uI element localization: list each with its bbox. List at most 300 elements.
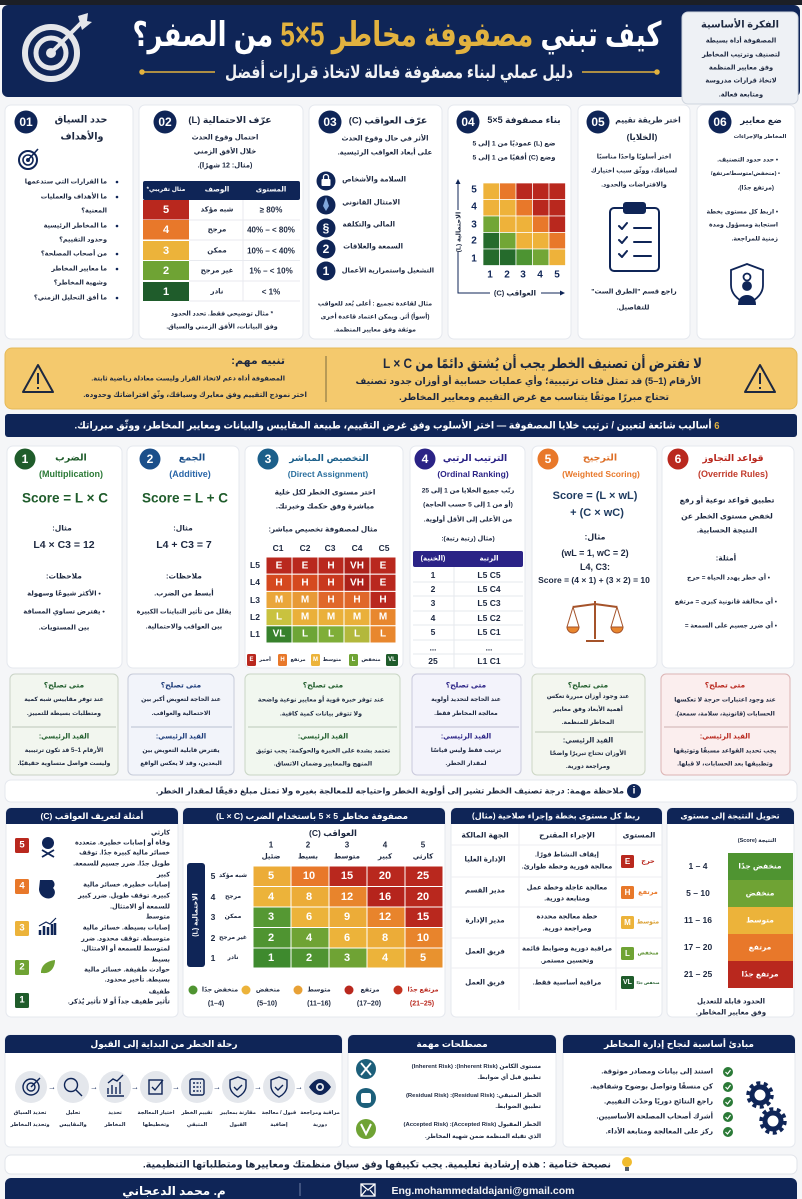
legend: مرتفع جدًا <box>407 986 439 994</box>
grid legend: منخفض <box>361 657 381 663</box>
panel: method 2 additive: 2 <box>147 452 154 466</box>
likelihood table: 5 <box>163 204 169 216</box>
score grid: 9 <box>344 911 350 923</box>
grid legend: مرتفع <box>290 657 306 663</box>
severity descriptions: خسائر مالية كبيرة جدًا. توقف <box>79 849 170 856</box>
panel: method 1 multiplication: • الأكثر شيوعًا وسهولة <box>27 588 101 598</box>
likelihood table: 3 <box>163 245 169 257</box>
journey labels: إضافية <box>270 1122 288 1128</box>
when-to-use card 4: معالجة المخاطر فقط. <box>434 710 498 717</box>
mini matrix: 1 <box>471 254 477 264</box>
panel: risk journey: رحلة الخطر من البداية إلى القبول <box>90 1039 238 1050</box>
mini matrix: 1 <box>487 270 493 280</box>
when-to-use card 5: عند وجود أوزان مبررة تعكس <box>547 692 629 700</box>
subtitle: دليل عملي لبناء مصفوفة فعالة لاتخاذ قرارات أفضل <box>225 60 573 83</box>
panel: method 5 weighted scoring: مثال: <box>585 532 605 542</box>
severity descriptions: كبير <box>156 872 170 878</box>
row headers: مرجح <box>225 894 241 900</box>
panel: principles: مبادئ أساسية لنجاح إدارة المخاطر <box>603 1038 754 1050</box>
bullet list: ما الأهداف والعمليات <box>41 192 107 200</box>
icon: gears <box>748 1083 785 1133</box>
likelihood table: مرجح <box>208 226 226 234</box>
panel: method 6 override rules: أمثلة: <box>716 552 736 562</box>
panel: step 02 likelihood: وفق البيانات، الأفق الزمني والسياق. <box>166 322 278 330</box>
severity descriptions: تأثير طفيف جداً أو لا تأثير يُذكر. <box>68 996 170 1006</box>
direct assignment grid: H <box>301 578 309 588</box>
column headers: كبير <box>377 852 393 860</box>
row headers: نادر <box>226 954 239 961</box>
score grid: 6 <box>344 932 350 944</box>
journey labels: تحديد <box>108 1110 122 1116</box>
icon: envelope <box>361 1184 375 1196</box>
header banner <box>2 5 800 97</box>
callout: core idea: ومتابعة فعالة. <box>719 92 763 98</box>
direct assignment grid: H <box>327 594 335 606</box>
when-to-use card 1: الأرقام 1–5 قد تكون ترتيبية <box>25 746 103 754</box>
panel: step 02 likelihood: 02 <box>158 115 172 129</box>
journey steps <box>15 1071 336 1103</box>
panel: method 1 multiplication: L4 × C3 = 12 <box>33 539 95 551</box>
level bands: مرتفع جدًا <box>741 970 779 978</box>
panel: step 03 consequences: عرّف العواقب (C) <box>349 114 427 126</box>
panel: level action table: الجهة المالكة <box>461 830 509 840</box>
direct assignment grid <box>247 543 398 666</box>
severity descriptions: بسيط <box>151 956 170 964</box>
mini matrix: 3 <box>520 270 526 280</box>
ranking table: 25 <box>428 656 438 666</box>
when-to-use card 4 <box>412 674 521 775</box>
column headers: 1 <box>269 840 274 850</box>
ranking table: ... <box>486 644 492 652</box>
when-to-use card 5 <box>532 674 645 775</box>
term text: مستوى الكامن (Inherent Risk): (Inherent Risk) <box>412 1063 541 1070</box>
when-to-use card 3: ولا تتوفر بيانات كمية كافية. <box>280 710 362 718</box>
direct assignment grid: L <box>354 628 360 640</box>
bullet list <box>25 178 118 302</box>
panel: method 3 direct assignment: مثال لمصفوفة تخصيص مباشر: <box>268 524 378 534</box>
journey labels: تحليل <box>66 1110 80 1116</box>
likelihood table: ممكن <box>207 246 227 254</box>
level badges: VL <box>623 979 633 986</box>
severity badges: 1 <box>19 994 25 1006</box>
term text: الخطر المقبول (Accepted Risk): (Accepted Risk) <box>404 1122 541 1128</box>
panel: step 03 consequences: (أسوأ) أثر. ويمكن اعتماد قاعدة أخرى <box>321 312 429 320</box>
severity descriptions: لمتوسط للسمعة أو الامتثال. <box>81 944 170 952</box>
direct assignment grid: C5 <box>379 543 390 553</box>
score grid: 1 <box>268 952 274 964</box>
column headers: كارثي <box>413 852 434 860</box>
mini matrix: 2 <box>504 270 510 280</box>
panel: step 03 consequences: الأثر في حال وقوع الحدث <box>341 134 429 142</box>
grid legend <box>247 654 398 666</box>
when-to-use card 3: القيد الرئيسي: <box>298 734 348 740</box>
panel: method 6 override rules: 6 <box>675 452 682 466</box>
panel: method 1 multiplication: 1 <box>22 452 29 466</box>
panel: step 05 scoring method <box>578 105 690 339</box>
ranking table: 2 <box>431 584 436 594</box>
warning banner: اختر نموذج التقييم وفق معايرك وسياقك، وثّق افتراضاتك وحدوده. <box>83 390 307 399</box>
ranking table: الرتبة <box>479 556 499 562</box>
level badges: M <box>624 918 631 927</box>
when-to-use card 6: وتطبيقها بعد الحسابات، لا قبلها. <box>677 760 773 768</box>
owners: مدير القسم <box>465 888 505 894</box>
direct assignment grid: L <box>328 628 334 640</box>
panel: step 03 consequences <box>309 105 442 339</box>
severity badges: 2 <box>19 962 25 972</box>
panel: method 5 weighted scoring <box>532 446 657 668</box>
panel: score to level: الحدود قابلة للتعديل <box>697 998 765 1006</box>
ranking table: 3 <box>431 598 436 608</box>
score grid: 20 <box>379 870 391 882</box>
journey labels: والمقاييس <box>59 1122 87 1128</box>
panel: step 06 criteria: • (منخفض/متوسط/مرتفع/ <box>711 171 780 177</box>
level badges <box>621 855 660 989</box>
severity descriptions: طويل جدًا. ضرر جسيم للسمعة. <box>73 860 170 868</box>
when-to-use card 4: متى تصلح؟ <box>446 680 487 690</box>
icon: target with arrow <box>25 13 92 79</box>
panel: step 02 likelihood: * مثال توضيحي فقط. تحدد الحدود <box>171 310 274 318</box>
panel: step 05 scoring method: (الخلايا) <box>627 132 658 142</box>
bullet list: وشهية المخاطر؟ <box>54 280 107 286</box>
legend: (11–16) <box>307 1000 331 1008</box>
panel: method 6 override rules: (Override Rules) <box>698 469 768 479</box>
panel: 5x5 score matrix <box>183 808 445 1017</box>
panel: method 2 additive: الجمع <box>179 452 205 464</box>
severity descriptions: كبيرة. توقف طويل. ضرر كبير <box>77 892 170 900</box>
direct assignment grid: VH <box>350 578 364 588</box>
severity descriptions: وفاة أو إصابات خطيرة. متعددة <box>75 838 170 846</box>
likelihood table: غير مرجح <box>201 268 234 274</box>
direct assignment grid: E <box>380 560 387 572</box>
severity badges <box>15 838 29 1008</box>
icon: info: i <box>633 786 636 796</box>
icon: warning left <box>23 365 53 392</box>
panel: step 06 criteria <box>697 105 795 339</box>
column headers: 2 <box>306 840 311 850</box>
score grid: 6 <box>306 911 312 923</box>
panel: method 2 additive: Score = L + C <box>142 490 228 506</box>
panel: step 06 criteria: استجابة ومسؤول ومدة <box>709 222 778 228</box>
when-to-use card 3: عند توفر خبرة قوية أو معايير نوعية واضحة <box>258 696 384 704</box>
legend: (17–20) <box>357 1000 381 1008</box>
panel: step 02 likelihood: عرّف الاحتمالية (L) <box>188 115 272 126</box>
mini matrix: العواقب (C) <box>494 288 536 298</box>
journey labels: مقارنة بمعايير <box>219 1110 256 1116</box>
ranking table: L5 C1 <box>477 627 501 637</box>
when-to-use card 5: أهمية الأبعاد وفق معايير <box>552 705 623 713</box>
row headers: 4 <box>211 892 216 902</box>
mini matrix: 4 <box>471 202 477 212</box>
term text <box>404 1063 541 1140</box>
level badges: حرج <box>641 858 655 865</box>
panel: step 05 scoring method: والافتراضات والحدود. <box>601 182 667 188</box>
consequence dimensions: المالي والتكلفة <box>343 220 395 228</box>
mini matrix <box>456 179 566 298</box>
panel: principles <box>563 1035 795 1147</box>
actions: إيقاف النشاط فورًا. <box>535 852 599 858</box>
mini matrix: 5 <box>471 184 477 196</box>
journey arrows: → <box>48 1082 56 1092</box>
panel: level action table: ربط كل مستوى بخطة وإجراء صلاحية (مثال) <box>472 812 640 820</box>
panel: method 4 ordinal ranking: 4 <box>422 452 429 466</box>
panel: method 1 multiplication: الضرب <box>55 452 87 464</box>
panel: score to level: النتيجة (Score) <box>738 838 776 844</box>
warning banner: تحتاج مبررًا موثقًا يتناسب مع غرض التقييم ومعايير المخاطر. <box>399 391 669 403</box>
mini matrix: 4 <box>537 270 543 280</box>
actions: معالجة فورية وخطة طوارئ. <box>522 864 612 870</box>
panel: method 2 additive: يقلل من تأثير التباينات الكبيرة <box>137 606 231 616</box>
journey labels: وتحديد المخاطر <box>9 1122 50 1128</box>
panel: score to level: تحويل النتيجة إلى مستوى <box>680 812 780 820</box>
column headers: ضئيل <box>262 854 281 860</box>
panel: step 02 likelihood: خلال الأفق الزمني <box>194 146 256 156</box>
journey arrows: → <box>172 1082 180 1092</box>
mini matrix: 2 <box>471 236 477 246</box>
direct assignment grid: M <box>353 612 361 622</box>
direct assignment grid: E <box>302 560 309 572</box>
closing tip <box>5 1155 797 1174</box>
panel: method 4 ordinal ranking: رتّب جميع الخلايا من 1 إلى 25 <box>422 487 514 494</box>
grid legend: VL <box>388 657 396 663</box>
icon: light bulb <box>622 1157 632 1171</box>
when-to-use card 5: متى تصلح؟ <box>568 680 609 690</box>
legend: (5–10) <box>257 1000 277 1008</box>
warning banner <box>5 348 797 409</box>
when-to-use card 1: وليست فواصل متساوية حقيقيًا. <box>18 760 111 767</box>
journey labels: المخاطر <box>103 1122 126 1128</box>
when-to-use card 4: القيد الرئيسي: <box>441 734 491 740</box>
score grid: 2 <box>268 932 274 944</box>
level bands: مرتفع <box>749 942 772 952</box>
journey labels: وتخطيطها <box>143 1122 169 1128</box>
actions: ومراجعة دورية. <box>542 926 592 932</box>
score grid <box>253 866 443 968</box>
severity icons <box>39 837 56 973</box>
subtitle ornaments <box>140 70 659 74</box>
bullet list: ما معايير المخاطر <box>50 266 107 272</box>
level badges: مرتفع <box>638 889 658 896</box>
panel: method 4 ordinal ranking: من الأعلى إلى الأقل أولوية. <box>424 514 512 524</box>
owners <box>464 856 506 986</box>
owners: فريق العمل <box>465 980 505 986</box>
score grid: 10 <box>417 932 429 944</box>
direct assignment grid: M <box>379 612 387 622</box>
score grid: 3 <box>268 911 274 923</box>
panel: method 6 override rules: • أي ضرر جسيم على السمعة = <box>685 620 777 630</box>
actions: مراقبة أساسية فقط. <box>533 978 601 986</box>
when-to-use card 3 <box>245 674 400 775</box>
direct assignment grid: L4 <box>250 577 260 587</box>
likelihood table: شبه مؤكد <box>201 206 233 214</box>
journey arrows: → <box>90 1082 98 1092</box>
panel: method 4 ordinal ranking: (Ordinal Ranking) <box>437 469 509 479</box>
score grid: 12 <box>341 891 353 903</box>
likelihood table: 10% – < 40% <box>247 246 295 256</box>
direct assignment grid: C4 <box>352 543 363 553</box>
likelihood table: ≥ 80% <box>260 206 282 214</box>
panel: 5x5 score matrix: مصفوفة مخاطر 5 × 5 باستخدام الضرب (L × C) <box>216 811 408 822</box>
panel: step 04 build matrix: 04 <box>461 115 475 129</box>
level bands: منخفض <box>746 888 775 898</box>
legend <box>188 986 439 1008</box>
bullet list: المعنية؟ <box>81 208 107 214</box>
row headers: ممكن <box>225 913 242 920</box>
panel: method 2 additive: (Additive) <box>169 469 211 479</box>
level badges: متوسط <box>637 918 659 926</box>
panel: step 01: والأهداف <box>60 130 104 142</box>
mini matrix: الاحتمالية (L) <box>456 212 462 252</box>
owners: مدير الإدارة <box>465 918 505 924</box>
grid legend: متوسط <box>323 657 341 663</box>
term text: تطبيق الضوابط. <box>495 1104 541 1110</box>
panel: step 03 consequences: 03 <box>323 115 337 129</box>
grid legend: L <box>352 657 356 663</box>
panel: step 03 consequences: على أبعاد العواقب الرئيسية. <box>338 148 432 156</box>
direct assignment grid: M <box>327 612 335 622</box>
direct assignment grid: C3 <box>325 543 336 553</box>
direct assignment grid: L3 <box>250 595 260 605</box>
score grid: 15 <box>341 870 353 882</box>
severity descriptions: حوادث طفيفة. خسائر مالية <box>84 966 170 974</box>
legend: (1–4) <box>208 1000 224 1008</box>
footer: م. محمد الدعجاني <box>122 1184 226 1199</box>
panel: method 3 direct assignment <box>245 446 403 668</box>
title: كيف تبني مصفوفة مخاطر 5×5 من الصفر؟ <box>132 16 662 55</box>
panel: method 2 additive: مثال: <box>173 524 193 532</box>
actions: معالجة عاجلة وخطة عمل <box>527 884 607 892</box>
journey arrows <box>48 1082 303 1092</box>
severity descriptions: إصابات خطيرة. خسائر مالية <box>83 882 170 888</box>
direct assignment grid: H <box>327 560 335 572</box>
when-to-use card 2: يفترض قابلية التعويض بين <box>142 747 220 754</box>
footer <box>5 1178 797 1199</box>
warning banner: لا تفترض أن تصنيف الخطر يجب أن يُشتق دائمًا من L × C <box>383 354 702 372</box>
severity badges: 3 <box>19 922 25 934</box>
when-to-use card 6: عند وجود اعتبارات حرجة لا تعكسها <box>674 696 776 704</box>
when-to-use card 2: القيد الرئيسي: <box>156 734 206 740</box>
panel: step 06 criteria: • حدد حدود التصنيف. <box>717 156 778 164</box>
journey labels: القبول <box>229 1122 247 1128</box>
level badges: E <box>625 857 631 866</box>
panel: level action table <box>451 808 662 1017</box>
severity descriptions: بسيطة. تأخير محدود. <box>105 974 170 984</box>
direct assignment grid: VH <box>350 560 364 572</box>
when-to-use card 1: القيد الرئيسي: <box>39 734 89 740</box>
panel: step 04 build matrix: وضع (C) أفقيًا من 1 إلى 5 <box>473 152 555 162</box>
when-to-use card 2: البعدين، وقد لا يعكس الواقع <box>140 760 222 767</box>
panel: level action table: الإجراء المقترح <box>539 830 595 840</box>
panel: method 4 ordinal ranking: (أو من 1 إلى 5 حسب الحاجة) <box>423 500 513 508</box>
panel: step 05 scoring method: 05 <box>591 115 605 129</box>
grid legend: M <box>313 657 318 663</box>
actions: خطة معالجة محددة <box>536 914 598 920</box>
term text: الخطر المتبقي: (Residual Risk): (Residual Risk) <box>406 1093 541 1099</box>
direct assignment grid: E <box>380 578 387 588</box>
likelihood axis bar <box>187 863 205 967</box>
panel: step 04 build matrix: بناء مصفوفة 5×5 <box>487 115 561 126</box>
column headers: بسيط <box>298 854 318 860</box>
panel: method 4 ordinal ranking: الترتيب الرتبي <box>443 453 507 464</box>
panel: method 2 additive: بين العواقب والاحتمالية. <box>146 624 222 630</box>
term icons <box>356 1059 376 1139</box>
panel: step 05 scoring method: لسياقك، ووثّق سبب اختيارك <box>591 166 677 174</box>
journey labels: تحديد السياق <box>14 1110 46 1116</box>
consequence dimensions: 1 <box>323 264 330 278</box>
likelihood table: مثال تقريبي* <box>147 186 186 193</box>
panel: step 01: حدد السياق <box>55 114 107 126</box>
column headers: متوسط <box>334 854 360 860</box>
panel: method 3 direct assignment: 3 <box>265 452 272 466</box>
when-to-use card 6: متى تصلح؟ <box>705 680 746 690</box>
ranking table: ... <box>430 644 436 652</box>
icon: clipboard checklist <box>610 203 659 271</box>
actions <box>522 852 612 986</box>
panel: step 01 <box>5 105 133 339</box>
level bands <box>728 853 793 988</box>
term text: الذي تقبله المنظمة ضمن شهية المخاطر. <box>425 1134 541 1140</box>
column headers <box>262 840 434 860</box>
likelihood table: نادر <box>210 288 224 296</box>
ranking table: L1 C1 <box>477 656 501 666</box>
panel: step 05 scoring method: راجع قسم "الطرق الست" <box>591 288 677 296</box>
direct assignment grid: M <box>301 612 309 622</box>
section banner: six methods: 6 أساليب شائعة لتعيين / ترتيب خلايا المصفوفة — اختر الأسلوب وفق غرض التقييم، طبيعة المقاييس والبيانات ومعايير المخاطر، ووثّق مبرراتك. <box>74 418 720 432</box>
score grid: 8 <box>382 932 388 944</box>
checklist: استند إلى بيانات ومصادر موثوقة. <box>601 1068 713 1076</box>
consequence dimensions <box>316 172 434 280</box>
actions: ومتابعة دورية. <box>544 896 590 902</box>
panel: step 06 criteria: • اربط كل مستوى بخطة <box>706 208 778 216</box>
journey labels: اختيار المعالجة <box>137 1110 175 1116</box>
legend: (21–25) <box>410 1000 434 1008</box>
direct assignment grid: C2 <box>300 543 311 553</box>
panel: method 1 multiplication: (Multiplication) <box>39 469 103 479</box>
score grid: 4 <box>306 932 313 944</box>
panel: step 05 scoring method: اختر أسلوبًا واحدًا مناسبًا <box>597 152 671 160</box>
journey labels: المتبقي <box>187 1122 207 1128</box>
owners: الإدارة العليا <box>464 856 506 864</box>
direct assignment grid: L <box>276 612 282 622</box>
when-to-use card 5: القيد الرئيسي: <box>563 738 613 744</box>
panel: method 5 weighted scoring: الترجيح <box>583 452 617 464</box>
panel: key terms <box>348 1035 556 1147</box>
score ranges: 17 – 20 <box>684 942 712 952</box>
consequence dimensions: السمعة والعلاقات <box>343 244 403 250</box>
panel: method 6 override rules: تطبيق قواعد نوعية أو رفع <box>680 494 775 504</box>
column headers: 4 <box>383 840 388 850</box>
bullet list: وحدود التقييم؟ <box>59 236 107 244</box>
panel: method 2 additive: L4 + C3 = 7 <box>156 539 212 551</box>
panel: method 5 weighted scoring: + (C × wC) <box>570 507 624 519</box>
ranking table: L5 C2 <box>477 613 501 623</box>
likelihood table: المستوى <box>256 186 286 194</box>
when-to-use card 1 <box>10 674 118 775</box>
term text: تطبيق قبل أي ضوابط. <box>478 1073 541 1081</box>
checklist: ركز على المعالجة ومتابعة الأداء. <box>606 1126 713 1136</box>
panel: consequence examples <box>6 808 178 1017</box>
section banner: six methods <box>5 414 797 437</box>
callout: core idea: المصفوفة أداة بسيطة <box>706 36 776 44</box>
level badges: L <box>625 949 630 958</box>
when-to-use card 6: القيد الرئيسي: <box>700 734 750 740</box>
panel: method 5 weighted scoring: 5 <box>545 452 552 466</box>
row headers: شبه مؤكد <box>219 872 247 879</box>
panel: method 2 additive: ملاحظات: <box>166 572 202 580</box>
panel: method 6 override rules: • أي مخالفة قانونية كبرى = مرتفع <box>675 596 777 606</box>
callout: core idea: الفكرة الأساسية <box>701 18 779 30</box>
panel: step 06 criteria: 06 <box>713 115 727 129</box>
legend: منخفض <box>256 986 280 994</box>
